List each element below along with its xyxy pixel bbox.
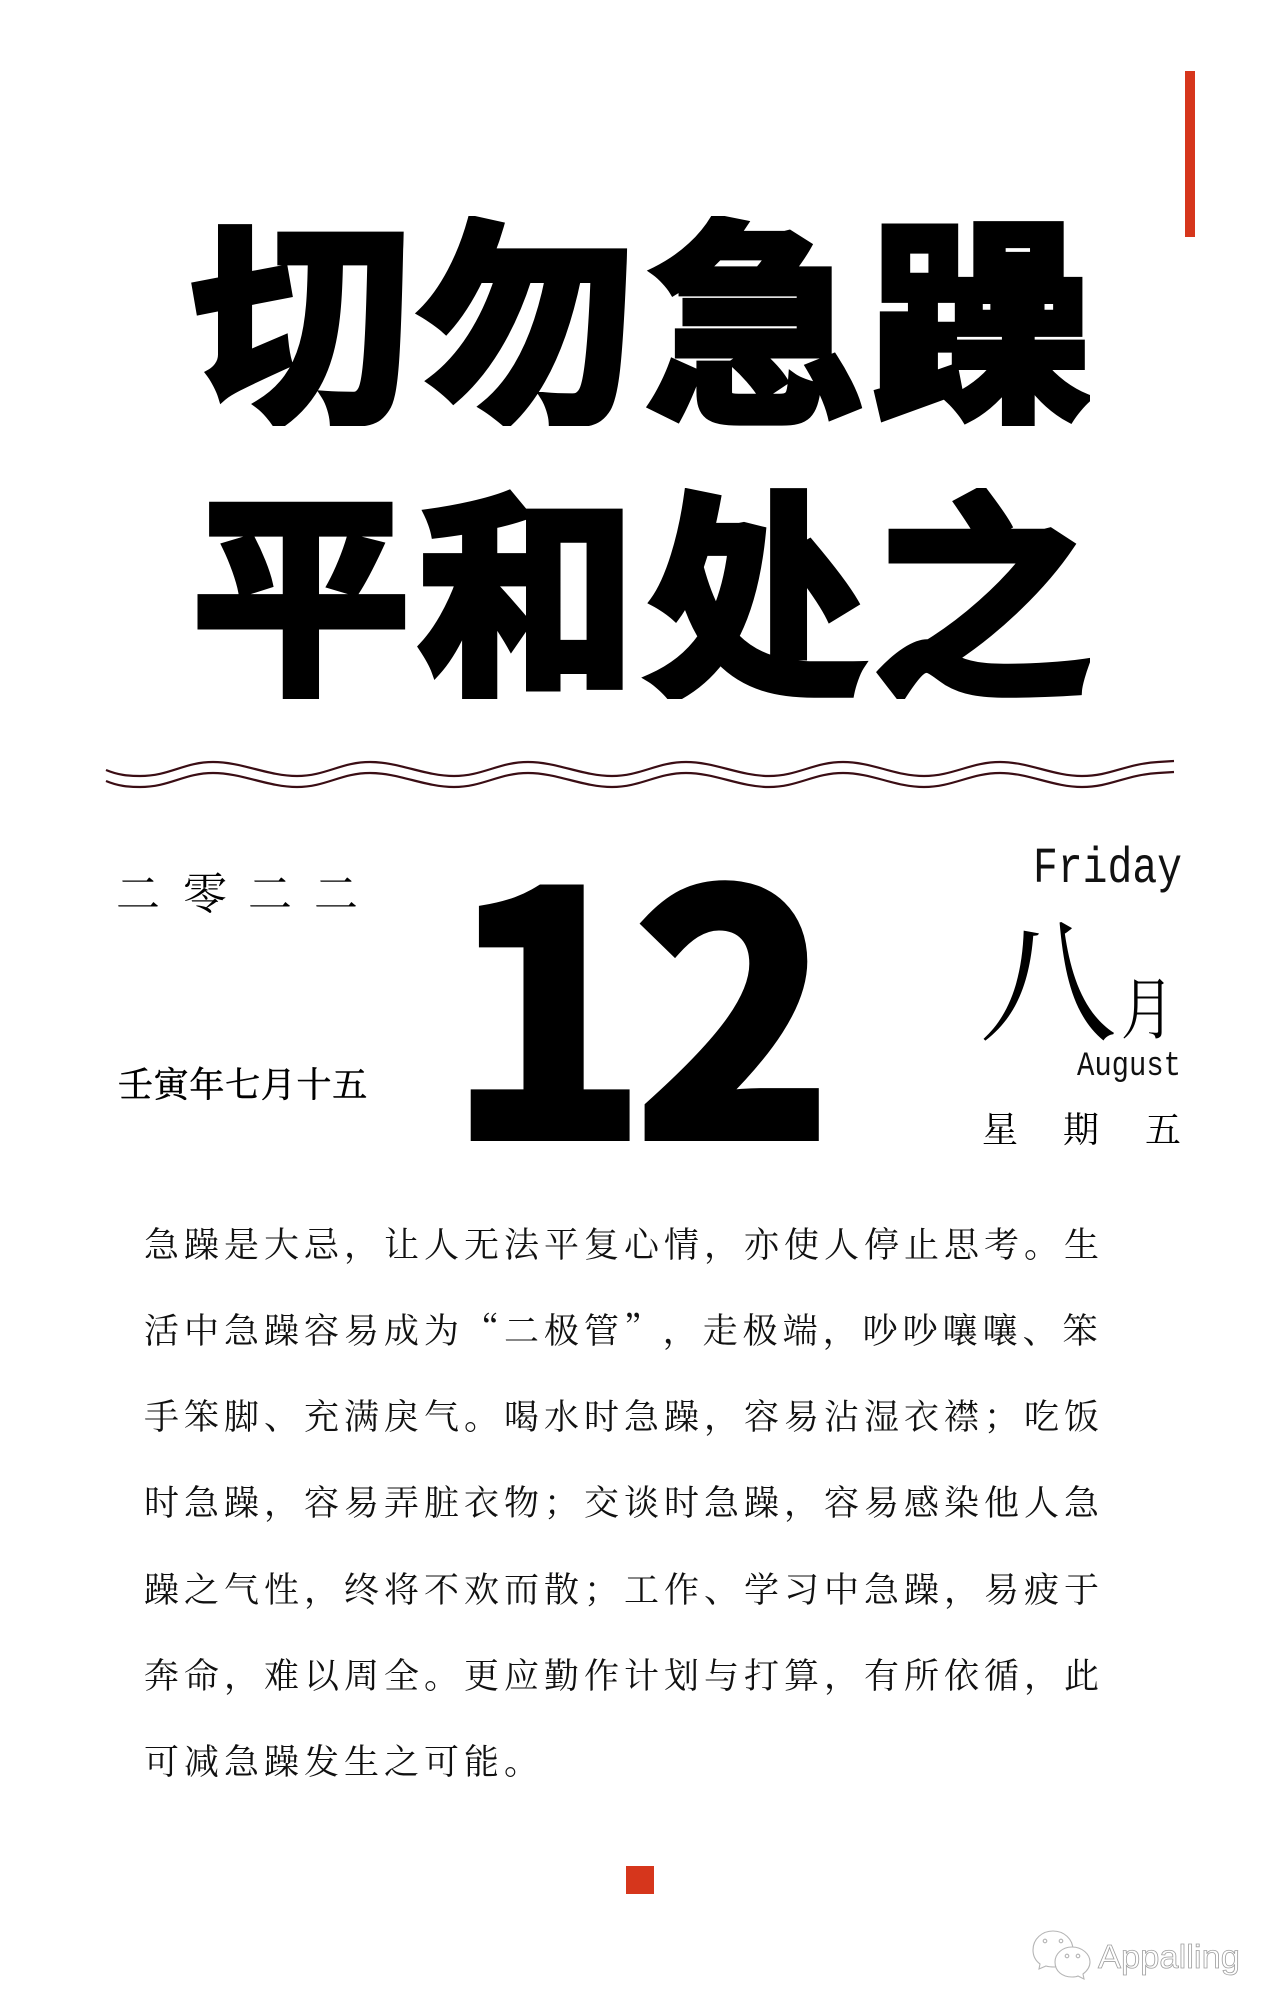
double wavy divider [106, 761, 1174, 787]
title: 和 [418, 482, 636, 725]
title: 勿 [418, 209, 636, 452]
weekday in Chinese: 五 [1145, 1110, 1181, 1150]
body paragraph: 奔命，难以周全。更应勤作计划与打算，有所依循，此 [144, 1657, 1104, 1696]
year in Chinese numerals [116, 870, 358, 919]
month in Chinese: 八 [979, 912, 1117, 1059]
title: 躁 [873, 209, 1091, 452]
body paragraph [144, 1226, 1104, 1782]
big day number: 2 [636, 753, 830, 1231]
body paragraph: 急躁是大忌，让人无法平复心情，亦使人停止思考。生 [144, 1226, 1104, 1265]
body paragraph: 躁之气性，终将不欢而散；工作、学习中急躁，易疲于 [144, 1571, 1104, 1610]
year in Chinese numerals: 二 [314, 870, 358, 919]
month in Chinese: 月 [1121, 974, 1173, 1049]
year in Chinese numerals: 二 [248, 870, 292, 919]
weekday in Chinese: 期 [1063, 1110, 1099, 1150]
watermark name: Appalling [1098, 1938, 1240, 1975]
big day number [450, 753, 830, 1231]
month in English: August [1077, 1048, 1181, 1086]
title: 急 [646, 209, 864, 452]
body paragraph: 时急躁，容易弄脏衣物；交谈时急躁，容易感染他人急 [144, 1484, 1104, 1523]
title: 切 [192, 209, 410, 452]
red square ornament [626, 1866, 654, 1894]
body paragraph: 可减急躁发生之可能。 [144, 1743, 544, 1782]
body paragraph: 活中急躁容易成为“二极管” ，走极端，吵吵嚷嚷、笨 [144, 1304, 1103, 1354]
year in Chinese numerals: 零 [183, 870, 227, 919]
body paragraph: 手笨脚、充满戾气。喝水时急躁，容易沾湿衣襟；吃饭 [144, 1398, 1104, 1437]
title: 平 [192, 482, 410, 725]
weekday in Chinese [982, 1110, 1181, 1150]
icon: chat bubbles [1033, 1931, 1090, 1979]
year in Chinese numerals: 二 [116, 870, 160, 919]
title: 之 [873, 482, 1091, 725]
watermark [1033, 1931, 1240, 1979]
weekday in English: Friday [1033, 841, 1182, 898]
weekday in Chinese: 星 [982, 1110, 1018, 1150]
big day number: 1 [450, 753, 644, 1231]
title [192, 209, 1091, 725]
lunar date: 壬寅年七月十五 [118, 1066, 368, 1105]
red accent bar [1185, 71, 1195, 237]
title: 处 [646, 482, 864, 725]
